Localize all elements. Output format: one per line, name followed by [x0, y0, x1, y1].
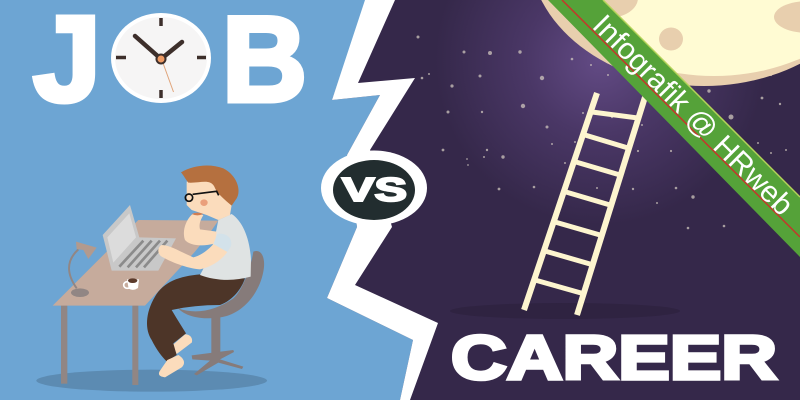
laptop: [103, 205, 176, 271]
coffee cup: [124, 278, 139, 290]
chair: [178, 251, 264, 375]
ladder: [524, 93, 645, 315]
sleeve: [213, 234, 231, 252]
front foot: [159, 355, 184, 377]
banner: infografik: [548, 0, 800, 257]
panel: job background: [0, 0, 413, 400]
illustration: person at desk: [36, 165, 267, 392]
night sky glow: [380, 0, 800, 300]
floor shadow: [36, 370, 267, 392]
vs badge: [321, 150, 427, 226]
title: job: [33, 0, 307, 127]
lightning divider: [327, 0, 438, 400]
vs label: VS: [342, 171, 407, 208]
ladder shadow: [450, 303, 680, 319]
near arm: [158, 240, 230, 269]
moon: [529, 0, 800, 86]
icon: clock: [111, 13, 211, 103]
trousers: [147, 274, 245, 361]
shirt: [200, 214, 251, 280]
back foot: [173, 334, 192, 354]
head: [181, 165, 239, 220]
desk: [53, 220, 218, 385]
desk lamp: [69, 242, 97, 297]
banner text: Infografik @ HRweb: [586, 9, 800, 222]
stars: [416, 36, 787, 229]
title: career: CAREER: [451, 324, 777, 393]
far arm: [184, 213, 217, 245]
moon craters: [578, 0, 800, 50]
